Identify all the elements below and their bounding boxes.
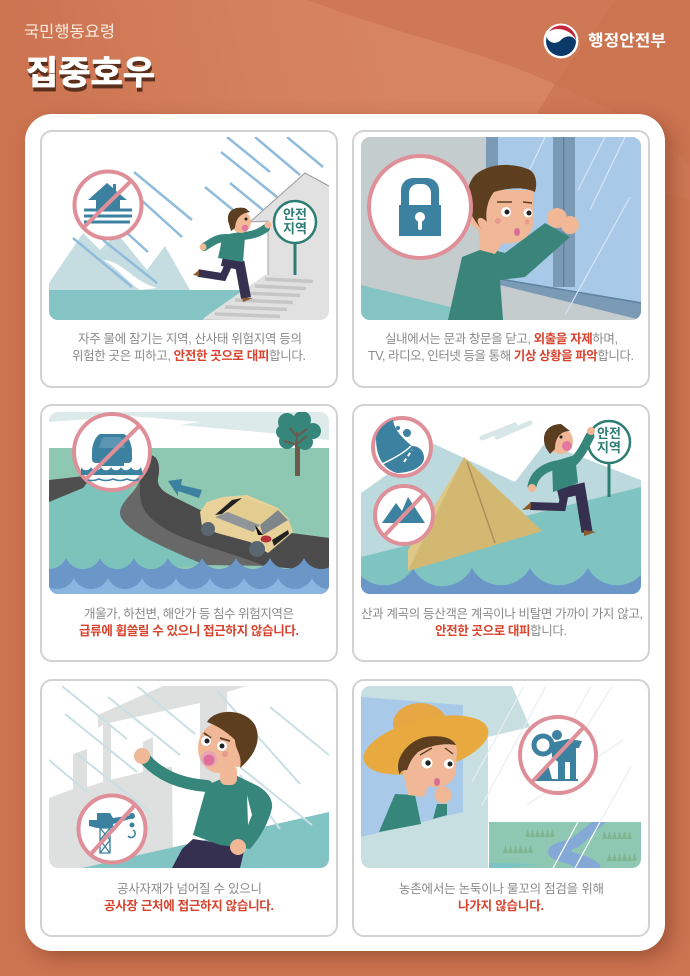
caption xyxy=(104,882,274,913)
caption: TV, 라디오, 인터넷 등을 통해 기상 상황을 파악합니다. xyxy=(368,348,634,363)
caption: 농촌에서는 논둑이나 물꼬의 점검을 위해 xyxy=(399,882,604,896)
panel: rural areas xyxy=(353,680,649,936)
caption xyxy=(72,332,306,363)
ministry logo: 행정안전부 xyxy=(588,31,666,50)
flood waves xyxy=(49,558,329,594)
illustration: tent and running man xyxy=(361,420,641,594)
caption xyxy=(399,882,604,913)
caption: 실내에서는 문과 창문을 닫고, 외출을 자제하며, xyxy=(385,331,618,346)
caption: 공사장 근처에 접근하지 않습니다. xyxy=(104,898,274,913)
prohibited: flooded house xyxy=(74,172,142,238)
illustration: car on flooded road xyxy=(49,412,329,594)
caption xyxy=(79,606,299,638)
prohibited: crane xyxy=(78,796,146,862)
safe zone sign: 안전 xyxy=(283,207,307,222)
prohibited: lock xyxy=(369,156,471,258)
tent xyxy=(408,457,542,571)
illustration: running to safe zone xyxy=(49,137,329,323)
prohibited: mountain slope xyxy=(375,486,433,544)
ministry logo xyxy=(544,24,666,58)
illustration: man at window xyxy=(361,137,641,320)
panel: stay indoors xyxy=(353,131,649,387)
prohibited: car in water xyxy=(74,414,150,490)
main title: 집중호우 xyxy=(26,54,155,91)
caption: 안전한 곳으로 대피합니다. xyxy=(435,623,567,638)
illustration: farmer at window xyxy=(358,686,641,868)
caption: 산과 계곡의 등산객은 계곡이나 비탈면 가까이 가지 않고, xyxy=(361,607,643,621)
arrow xyxy=(168,479,202,498)
caption: 자주 물에 잠기는 지역, 산사태 위험지역 등의 xyxy=(78,332,302,346)
safe zone sign: 지역 xyxy=(597,440,621,455)
tree xyxy=(276,411,321,476)
header subtitle: 국민행동요령 xyxy=(24,23,115,41)
panel: flood-prone areas xyxy=(41,131,337,387)
running man xyxy=(193,208,272,302)
safe zone sign: 지역 xyxy=(283,221,307,236)
caption: 개울가, 하천변, 해안가 등 침수 위험지역은 xyxy=(84,606,294,621)
safe zone sign: 안전 xyxy=(597,426,621,441)
man xyxy=(448,165,579,320)
caption: 급류에 휩쓸릴 수 있으니 접근하지 않습니다. xyxy=(79,623,299,638)
car xyxy=(200,495,293,557)
white card xyxy=(25,114,665,951)
farmer xyxy=(358,703,494,832)
man xyxy=(134,712,272,868)
illustration: man near construction xyxy=(49,686,329,868)
prohibited: falling rocks xyxy=(373,418,431,476)
caption: 나가지 않습니다. xyxy=(458,898,544,913)
running man xyxy=(522,424,596,536)
caption: 위험한 곳은 피하고, 안전한 곳으로 대피합니다. xyxy=(72,348,306,363)
caption xyxy=(368,331,634,363)
panel: construction site xyxy=(41,680,337,936)
panel: riverside danger xyxy=(32,405,346,661)
safe zone sign xyxy=(588,421,630,497)
panel: mountains and valleys xyxy=(353,405,649,661)
water scallops xyxy=(361,568,641,594)
caption xyxy=(361,607,643,638)
caption: 공사자재가 넘어질 수 있으니 xyxy=(117,882,262,896)
prohibited: field inspection xyxy=(520,717,596,793)
safe zone sign xyxy=(274,201,316,275)
